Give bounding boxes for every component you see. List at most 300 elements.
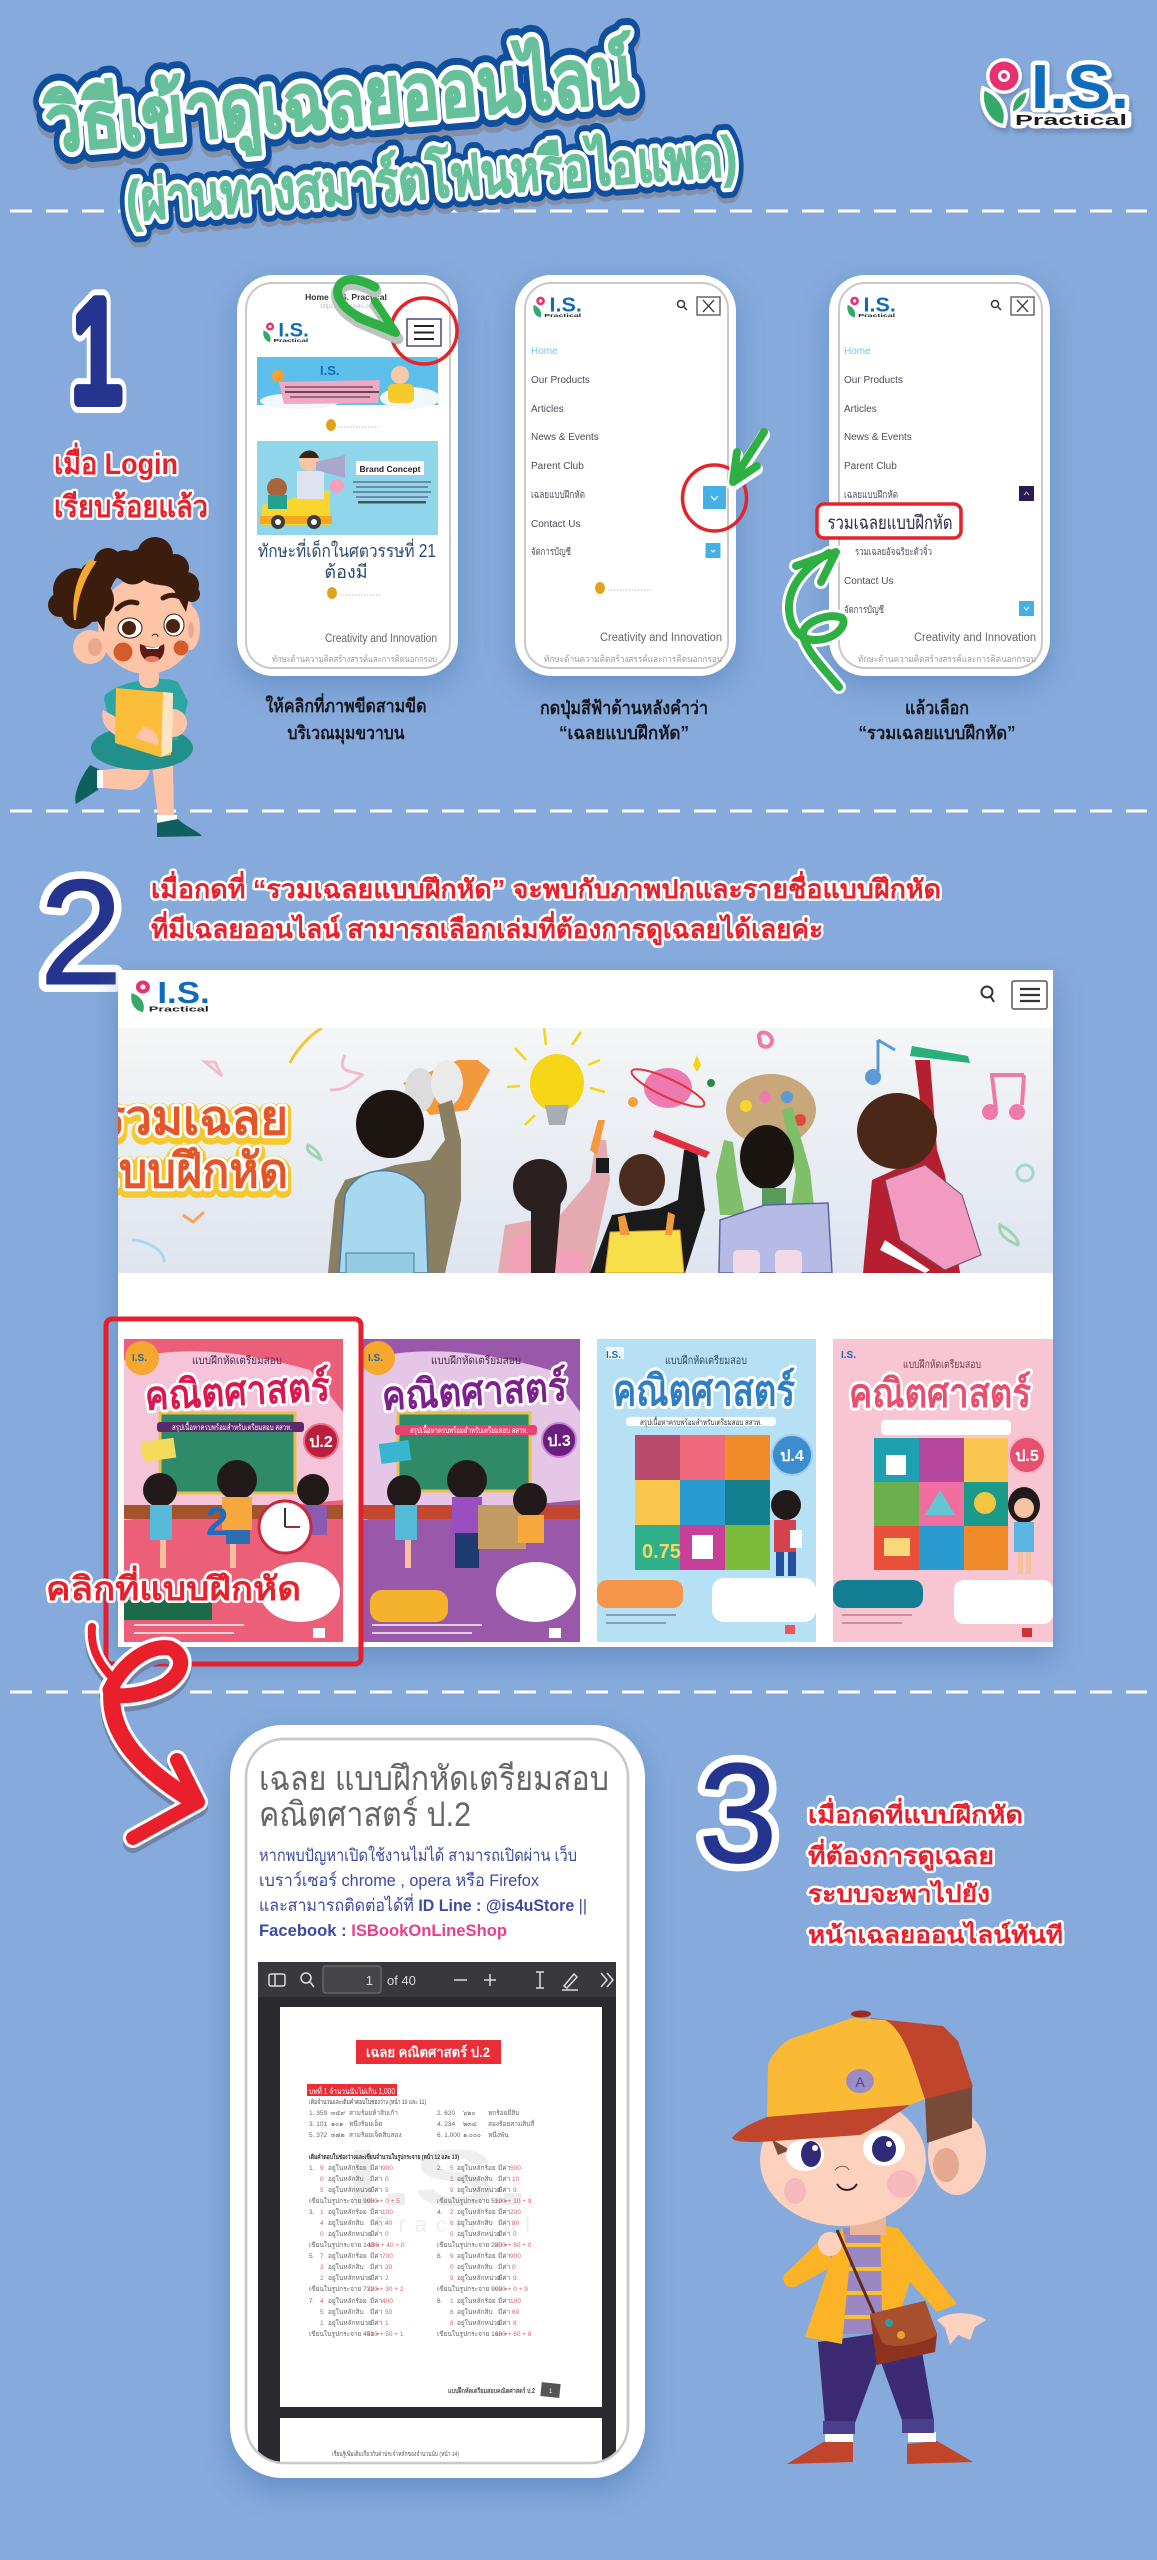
- pdf answers: มีค่า: [370, 2230, 383, 2238]
- text: step 1 intro: [54, 442, 208, 524]
- pdf viewer: [258, 1962, 616, 2472]
- phone 4: answer page: [230, 1725, 645, 2490]
- pdf answers: เขียนในรูปกระจาย 905 =: [309, 2198, 380, 2205]
- number 3: 3: [699, 1734, 777, 1893]
- planet: [628, 1055, 715, 1113]
- pdf answers: อยู่ในหลักสิบ: [328, 2219, 364, 2227]
- pdf answers: หนึ่งร้อยเอ็ด: [349, 2119, 382, 2128]
- pdf answers: 9: [450, 2187, 454, 2194]
- logo: I.S. Practical top right: Practical: [1015, 112, 1127, 129]
- book: P.3: แบบฝึกหัดเตรียมสอบ: [431, 1354, 521, 1367]
- pdf answers: 0: [512, 2264, 516, 2271]
- menu list: Parent Club: [531, 461, 584, 472]
- pdf answers: 100: [382, 2209, 393, 2216]
- pdf answers: 0: [450, 2231, 454, 2238]
- red highlight circle: [682, 465, 746, 531]
- pdf answers: อยู่ในหลักหน่วย: [457, 2230, 501, 2238]
- pdf answers: เติมคำตอบในช่องว่างและเขียนจำนวนในรูปกระจาย (หน้า 12 และ 13): [309, 2152, 459, 2162]
- number 1: 1: [71, 269, 123, 432]
- boy cap: A: [855, 2074, 865, 2090]
- pdf answers: มีค่า: [498, 2263, 511, 2271]
- book: P.4: 0.75: [642, 1541, 681, 1563]
- watermark: [353, 2150, 528, 2232]
- pdf answers: สามร้อยเจ็ดสิบสอง: [349, 2130, 402, 2139]
- book: P.3: สรุปเนื้อหาครบพร้อมสำหรับเตรียมสอบ สสวท.: [410, 1424, 528, 1435]
- book: P.2: 2: [206, 1500, 228, 1544]
- pdf chapter label: [307, 2084, 397, 2096]
- pdf answers: มีค่า: [370, 2274, 383, 2282]
- small logo: I.S.: [863, 293, 896, 317]
- menu list: Articles: [531, 404, 564, 415]
- next page text: เรียนรู้เพิ่มเติมเกี่ยวกับค่าประจำหลักของจำนวนนับ (หน้า 14): [332, 2449, 459, 2458]
- girl head: [48, 537, 200, 674]
- step 2 description: ที่มีเฉลยออนไลน์ สามารถเลือกเล่มที่ต้องการดูเฉลยได้เลยค่ะ: [151, 910, 823, 946]
- pdf answers: 0: [513, 2231, 517, 2238]
- article heading: ทักษะที่เด็กในศตวรรษที่ 21: [258, 538, 436, 561]
- pdf banner: เฉลย คณิตศาสตร์ ป.2: [366, 2044, 490, 2060]
- blue button small: [706, 543, 720, 558]
- pdf answers: 900: [510, 2253, 521, 2260]
- pdf answers: 2. 620: [437, 2110, 455, 2117]
- menu list: Our Products: [844, 375, 903, 386]
- pdf answers: อยู่ในหลักสิบ: [328, 2175, 364, 2183]
- book: P.3: I.S.: [368, 1353, 383, 1364]
- music notes: [865, 1040, 1025, 1120]
- pdf footer: แบบฝึกหัดเตรียมสอบคณิตศาสตร์ ป.2: [448, 2386, 535, 2395]
- answer page heading: เฉลย แบบฝึกหัดเตรียมสอบ: [259, 1760, 609, 1798]
- banner: brand intro: I.S.: [320, 363, 340, 378]
- pdf answers: 2: [385, 2275, 389, 2282]
- step 2 description: เมื่อกดที่ “รวมเฉลยแบบฝึกหัด” จะพบกับภาพปกและรายชื่อแบบฝึกหัด: [151, 870, 941, 904]
- pdf answers: 900 + 0 + 9: [495, 2286, 528, 2293]
- book: P.3: ป.3: [547, 1433, 571, 1450]
- pdf answers: 1: [450, 2298, 454, 2305]
- watermark: I.S.: [345, 2133, 530, 2222]
- caption 2: “เฉลยแบบฝึกหัด”: [559, 723, 689, 743]
- title line 1: วิธีเข้าดูเฉลยออนไลน์: [41, 28, 639, 174]
- logo: I.S. Practical top right: I.S.: [1033, 57, 1131, 126]
- pdf answers: อยู่ในหลักหน่วย: [328, 2319, 372, 2327]
- pdf answers: อยู่ในหลักหน่วย: [457, 2319, 501, 2327]
- caption 3: แล้วเลือก: [905, 698, 969, 718]
- pdf answers: 60: [512, 2309, 520, 2316]
- menu list: Parent Club: [844, 461, 897, 472]
- pdf answers: 9: [450, 2253, 454, 2260]
- pdf footer: [448, 2382, 561, 2398]
- menu list: Articles: [844, 404, 877, 415]
- step 3 description: เมื่อกดที่แบบฝึกหัด: [808, 1797, 1023, 1829]
- pdf answers: สามร้อยห้าสิบเก้า: [349, 2109, 398, 2117]
- banner title: [118, 1102, 292, 1198]
- number 2: 2: [39, 848, 123, 1016]
- pdf answers: 900: [382, 2165, 393, 2172]
- collapse button: [1019, 486, 1034, 501]
- pdf answers: เขียนในรูปกระจาย 168 =: [437, 2330, 508, 2338]
- book: P.4: แบบฝึกหัดเตรียมสอบ: [665, 1354, 747, 1367]
- number 3: 3: [699, 1734, 777, 1893]
- answer page heading: [259, 1760, 609, 1834]
- step 3 description: ระบบจะพาไปยัง: [808, 1879, 990, 1908]
- search icon: [678, 300, 687, 310]
- pdf answers: 700: [382, 2253, 393, 2260]
- book: P.2: ป.2: [309, 1434, 333, 1451]
- pdf answers: ๓๕๙: [331, 2110, 345, 2117]
- boy bag: [837, 2230, 937, 2365]
- pdf answers: 0: [450, 2264, 454, 2271]
- pdf answers: อยู่ในหลักหน่วย: [328, 2230, 372, 2238]
- help text: Facebook : ISBookOnLineShop: [259, 1921, 507, 1940]
- green curly arrow: [789, 552, 843, 687]
- pdf answers: ๖๒๐: [463, 2110, 475, 2117]
- title line 1: วิธีเข้าดูเฉลยออนไลน์: [41, 28, 639, 174]
- pdf answers: เขียนในรูปกระจาย 732 =: [309, 2286, 380, 2293]
- pdf answers: มีค่า: [498, 2252, 511, 2260]
- pdf answers: อยู่ในหลักสิบ: [457, 2263, 493, 2271]
- pdf answers: 4. 234: [437, 2121, 455, 2128]
- step 3 description: [808, 1797, 1063, 1949]
- article heading: [258, 538, 436, 582]
- book: P.2: แบบฝึกหัดเตรียมสอบ: [192, 1354, 282, 1367]
- step 2 description: [151, 870, 941, 946]
- pdf answers: มีค่า: [370, 2164, 383, 2172]
- pdf answers: 4: [320, 2220, 324, 2227]
- pdf answers: มีค่า: [498, 2186, 511, 2194]
- pdf answers: 5. 372: [309, 2132, 327, 2139]
- book: P.2: สรุปเนื้อหาครบพร้อมสำหรับเตรียมสอบ สสวท.: [172, 1421, 292, 1432]
- pdf banner: [356, 2040, 501, 2064]
- pdf answers: ๑๐๑: [331, 2121, 343, 2128]
- browser title: [305, 292, 387, 310]
- small logo: [533, 294, 582, 319]
- book: P.5: I.S.: [841, 1350, 856, 1361]
- pdf answers: 30: [385, 2264, 393, 2271]
- pdf answers: อยู่ในหลักร้อย: [328, 2297, 367, 2305]
- boy head: [760, 2087, 986, 2235]
- pdf answers: มีค่า: [370, 2208, 383, 2216]
- pdf answers: อยู่ในหลักร้อย: [328, 2208, 367, 2216]
- help text: หากพบปัญหาเปิดใช้งานไม่ได้ สามารถเปิดผ่าน เว็บ: [259, 1844, 577, 1865]
- pdf answers: 1: [385, 2320, 389, 2327]
- doodles: [132, 1028, 1033, 1262]
- menu list: News & Events: [844, 432, 912, 443]
- blue expand button: [703, 486, 726, 509]
- number 1: 1: [71, 269, 123, 432]
- pdf answers: 5: [320, 2309, 324, 2316]
- boy shoes and legs: [787, 2334, 973, 2464]
- skill title: Creativity and Innovation: [325, 633, 437, 645]
- book: P.3: [361, 1339, 580, 1642]
- pdf answers: อยู่ในหลักสิบ: [457, 2308, 493, 2316]
- title line 2: (ผ่านทางสมาร์ตโฟนหรือไอแพด): [124, 128, 739, 238]
- pdf answers: 1: [450, 2176, 454, 2183]
- pdf answers: 4.: [437, 2209, 443, 2216]
- menu list: News & Events: [531, 432, 599, 443]
- phone inner border: [246, 1739, 628, 2463]
- pdf answers: 9: [513, 2275, 517, 2282]
- close button: [1011, 297, 1034, 315]
- pdf answers: อยู่ในหลักหน่วย: [457, 2274, 501, 2282]
- kid 2: [498, 1120, 610, 1273]
- phone 1: hamburger step: [237, 275, 458, 686]
- pdf answers: 3. 101: [309, 2121, 327, 2128]
- pdf answers: หนึ่งพัน: [488, 2130, 509, 2139]
- pdf toolbar: 1: [366, 1973, 373, 1988]
- pdf answers: มีค่า: [370, 2252, 383, 2260]
- banner title: รวมเฉลย: [100, 1095, 288, 1148]
- step 3 description: หน้าเฉลยออนไลน์ทันที: [808, 1920, 1063, 1949]
- pdf answers: 900 + 0 + 5: [367, 2198, 400, 2205]
- browser title: Home - I.S. Practical: [305, 292, 387, 302]
- pdf answers: 6. 1,000: [437, 2132, 461, 2139]
- small logo: Practical: [858, 313, 896, 319]
- book: P.4: ป.4: [780, 1448, 804, 1465]
- kid 4: [716, 1107, 832, 1275]
- blue button: [1019, 601, 1034, 616]
- title line 2: (ผ่านทางสมาร์ตโฟนหรือไอแพด): [124, 123, 739, 233]
- pdf answers: 40: [385, 2220, 393, 2227]
- pdf answers: อยู่ในหลักร้อย: [457, 2252, 496, 2260]
- logo: I.S. Practical top right: Practical: [1017, 116, 1129, 133]
- help text: และสามารถติดต่อได้ที่ ID Line : @is4uStore ||: [259, 1893, 587, 1915]
- green arrow: [338, 279, 398, 339]
- pdf answers: เขียนในรูปกระจาย 451 =: [309, 2331, 380, 2338]
- pdf answers: 400 + 50 + 1: [367, 2331, 404, 2338]
- pdf answers: สองร้อยสามสิบสี่: [488, 2119, 534, 2128]
- pdf answers: 9: [320, 2165, 324, 2172]
- title line 2: (ผ่านทางสมาร์ตโฟนหรือไอแพด): [124, 123, 739, 233]
- browser title: https://www.is4u.co: [320, 304, 372, 310]
- bee divider: [595, 582, 651, 594]
- pdf answers: อยู่ในหลักสิบ: [457, 2219, 493, 2227]
- logo: I.S. Practical top right: [982, 53, 1131, 133]
- pdf answers: 7: [320, 2253, 324, 2260]
- book: P.5: [833, 1339, 1053, 1642]
- menu list: Home: [531, 346, 558, 357]
- title: [41, 28, 739, 238]
- answer page heading: คณิตศาสตร์ ป.2: [259, 1796, 471, 1834]
- title line 1: วิธีเข้าดูเฉลยออนไลน์: [41, 28, 639, 174]
- red highlight rectangle: [106, 1319, 361, 1664]
- pdf answers: 8: [450, 2220, 454, 2227]
- pdf answers: 8.: [437, 2298, 443, 2305]
- search icon: [992, 300, 1001, 310]
- article heading: ต้องมี: [324, 562, 368, 582]
- banner: brand concept: Brand Concept: [360, 464, 421, 474]
- phone 3: select step: [789, 275, 1050, 687]
- pdf answers: 0: [320, 2176, 324, 2183]
- character: girl with book: [48, 537, 202, 837]
- pdf answers: 8: [513, 2320, 517, 2327]
- pdf answers: 100 + 40 + 0: [368, 2242, 405, 2249]
- book: P.4: คณิตศาสตร์: [613, 1367, 795, 1414]
- pdf answers: มีค่า: [370, 2219, 383, 2227]
- pdf answers: อยู่ในหลักหน่วย: [328, 2186, 372, 2194]
- open book: [403, 1060, 490, 1115]
- pdf answers: [309, 2098, 534, 2338]
- pdf answers: มีค่า: [498, 2230, 511, 2238]
- pdf answers: มีค่า: [498, 2164, 511, 2172]
- menu list: จัดการบัญชี: [844, 604, 884, 616]
- yellow bulb: [507, 1028, 605, 1125]
- caption 2: กดปุ่มสีฟ้าด้านหลังคำว่า: [540, 698, 708, 720]
- pdf page: [280, 2007, 602, 2407]
- menu list: เฉลยแบบฝึกหัด: [531, 489, 585, 501]
- pdf answers: 200 + 80 + 0: [495, 2242, 532, 2249]
- kid 3: [590, 1130, 710, 1273]
- pdf answers: มีค่า: [498, 2274, 511, 2282]
- logo: I.S. Practical top right: I.S.: [1031, 53, 1129, 122]
- pdf toolbar: [258, 1962, 616, 1997]
- pdf answers: 4: [320, 2298, 324, 2305]
- pdf answers: 2: [450, 2209, 454, 2216]
- pdf answers: หกร้อยยี่สิบ: [488, 2108, 519, 2117]
- phone 2: menu step: [515, 275, 764, 686]
- menu list: [844, 346, 932, 616]
- pdf answers: 9: [513, 2187, 517, 2194]
- pdf answers: มีค่า: [370, 2308, 383, 2316]
- pdf answers: มีค่า: [370, 2297, 383, 2305]
- pdf answers: 100 + 60 + 8: [495, 2331, 532, 2338]
- pdf answers: 1: [320, 2320, 324, 2327]
- book: P.5: ป.5: [1015, 1448, 1039, 1465]
- highlighted menu item: [817, 504, 961, 538]
- section dividers: [10, 211, 1147, 1692]
- step 3 description: ที่ต้องการดูเฉลย: [808, 1838, 994, 1871]
- pdf answers: 80: [512, 2220, 520, 2227]
- next pdf page: [280, 2418, 602, 2462]
- red highlight circle: [391, 298, 457, 364]
- banner: kids drawing on wall: [90, 1028, 1053, 1278]
- pdf answers: 6: [450, 2309, 454, 2316]
- skill title: Creativity and Innovation: [914, 632, 1036, 644]
- text: step 1 intro: เรียบร้อยแล้ว: [54, 491, 208, 524]
- pdf answers: อยู่ในหลักสิบ: [328, 2263, 364, 2271]
- caption 3: [858, 698, 1016, 743]
- pdf footer: 1: [549, 2389, 553, 2395]
- pdf answers: 3: [320, 2264, 324, 2271]
- pdf answers: มีค่า: [370, 2319, 383, 2327]
- menu list: เฉลยแบบฝึกหัด: [844, 489, 898, 501]
- site logo: [131, 975, 210, 1013]
- pdf answers: อยู่ในหลักสิบ: [457, 2175, 493, 2183]
- logo: I.S. Practical top right: I.S.: [1031, 53, 1129, 122]
- pdf answers: มีค่า: [498, 2319, 511, 2327]
- site logo: Practical: [149, 1005, 209, 1013]
- pdf answers: เขียนในรูปกระจาย 519 =: [437, 2197, 508, 2205]
- book: P.4: I.S.: [606, 1350, 621, 1361]
- book: P.4: สรุปเนื้อหาครบพร้อมสำหรับเตรียมสอบ สสวท.: [640, 1416, 762, 1427]
- text: step 1 intro: เมื่อ Login: [54, 442, 178, 481]
- caption 1: บริเวณมุมขวาบน: [288, 723, 405, 745]
- pdf answers: อยู่ในหลักร้อย: [328, 2252, 367, 2260]
- caption 3: “รวมเฉลยแบบฝึกหัด”: [858, 723, 1016, 743]
- pdf answers: เขียนในรูปกระจาย 280 =: [437, 2241, 508, 2249]
- help text: [259, 1844, 587, 1940]
- pdf answers: มีค่า: [370, 2175, 383, 2183]
- title line 2: (ผ่านทางสมาร์ตโฟนหรือไอแพด): [124, 123, 739, 233]
- pdf answers: 9: [450, 2275, 454, 2282]
- small logo: [847, 294, 896, 319]
- pdf answers: ๒๓๔: [463, 2121, 477, 2128]
- boy body: [783, 2225, 986, 2345]
- book: P.5: แบบฝึกหัดเตรียมสอบ: [903, 1358, 981, 1371]
- pdf answers: 10: [512, 2176, 520, 2183]
- pdf answers: เขียนในรูปกระจาย 140 =: [309, 2242, 380, 2249]
- banner title: รวมเฉลย: [100, 1092, 288, 1145]
- skill description: ทักษะด้านความคิดสร้างสรรค์และการคิดนอกกรอบ: [272, 653, 437, 664]
- pdf answers: 500 + 10 + 9: [495, 2198, 532, 2205]
- title line 1: วิธีเข้าดูเฉลยออนไลน์: [41, 34, 639, 180]
- highlighted menu item: รวมเฉลยแบบฝึกหัด: [828, 513, 952, 534]
- pdf answers: มีค่า: [498, 2175, 511, 2183]
- book: P.2: [124, 1339, 343, 1642]
- pdf answers: 1: [320, 2209, 324, 2216]
- book: P.3: คณิตศาสตร์: [381, 1364, 568, 1419]
- logo: I.S. Practical top right: Practical: [1015, 112, 1127, 129]
- skill description: ทักษะด้านความคิดสร้างสรรค์และการคิดนอกกรอบ: [858, 653, 1036, 664]
- pdf answers: อยู่ในหลักร้อย: [328, 2164, 367, 2172]
- pdf answers: มีค่า: [498, 2219, 511, 2227]
- pdf answers: 100: [510, 2298, 521, 2305]
- menu list: Contact Us: [531, 519, 580, 530]
- bee divider 2: [327, 587, 380, 599]
- pdf answers: 0: [385, 2231, 389, 2238]
- character: boy with cap: [732, 2010, 986, 2464]
- menu list: Contact Us: [844, 576, 893, 587]
- pdf answers: 6.: [437, 2253, 443, 2260]
- book: P.4: [597, 1339, 816, 1642]
- pdf answers: มีค่า: [370, 2186, 383, 2194]
- pdf answers: 8: [450, 2320, 454, 2327]
- pdf answers: 5.: [309, 2253, 314, 2260]
- pdf answers: อยู่ในหลักร้อย: [457, 2164, 496, 2172]
- pdf answers: 50: [385, 2309, 393, 2316]
- skill description: ทักษะด้านความคิดสร้างสรรค์และการคิดนอกกรอบ: [544, 653, 722, 664]
- pdf answers: 5: [450, 2165, 454, 2172]
- pdf answers: อยู่ในหลักร้อย: [457, 2208, 496, 2216]
- pdf answers: 2.: [437, 2165, 443, 2172]
- banner: brand intro: [257, 357, 440, 409]
- pdf answers: 2: [320, 2275, 324, 2282]
- banner title: แบบฝึกหัด: [90, 1148, 288, 1201]
- pdf answers: 500: [510, 2165, 521, 2172]
- phone shadow: [237, 285, 458, 686]
- pdf answers: 1. 359: [309, 2110, 327, 2117]
- small logo: I.S.: [549, 293, 582, 317]
- pdf answers: 5: [320, 2187, 324, 2194]
- pdf answers: ๓๗๒: [331, 2132, 345, 2139]
- click label: คลิกที่แบบฝึกหัด: [46, 1565, 301, 1607]
- book: P.2: I.S.: [132, 1353, 147, 1364]
- menu list: [531, 346, 599, 558]
- caption 1: [266, 693, 426, 745]
- pdf answers: เติมจำนวนและเติมคำตอบในช่องว่าง (หน้า 10 และ 11): [309, 2098, 426, 2106]
- watermark: Practical: [375, 2212, 530, 2237]
- pdf answers: 0: [320, 2231, 324, 2238]
- menu list: จัดการบัญชี: [531, 546, 571, 558]
- kid 5: [857, 1046, 981, 1273]
- pdf answers: อยู่ในหลักหน่วย: [328, 2274, 372, 2282]
- book: P.2: คณิตศาสตร์: [144, 1364, 331, 1419]
- pdf answers: อยู่ในหลักหน่วย: [457, 2186, 501, 2194]
- menu list: รวมเฉลยอัจฉริยะตัวจิ๋ว: [855, 544, 932, 558]
- red curly arrow: [92, 1627, 198, 1843]
- close button: [697, 297, 720, 315]
- pdf answers: เขียนในรูปกระจาย 909 =: [437, 2285, 508, 2293]
- small logo: Practical: [544, 313, 582, 319]
- pdf answers: อยู่ในหลักสิบ: [328, 2308, 364, 2316]
- pdf answers: 400: [382, 2298, 393, 2305]
